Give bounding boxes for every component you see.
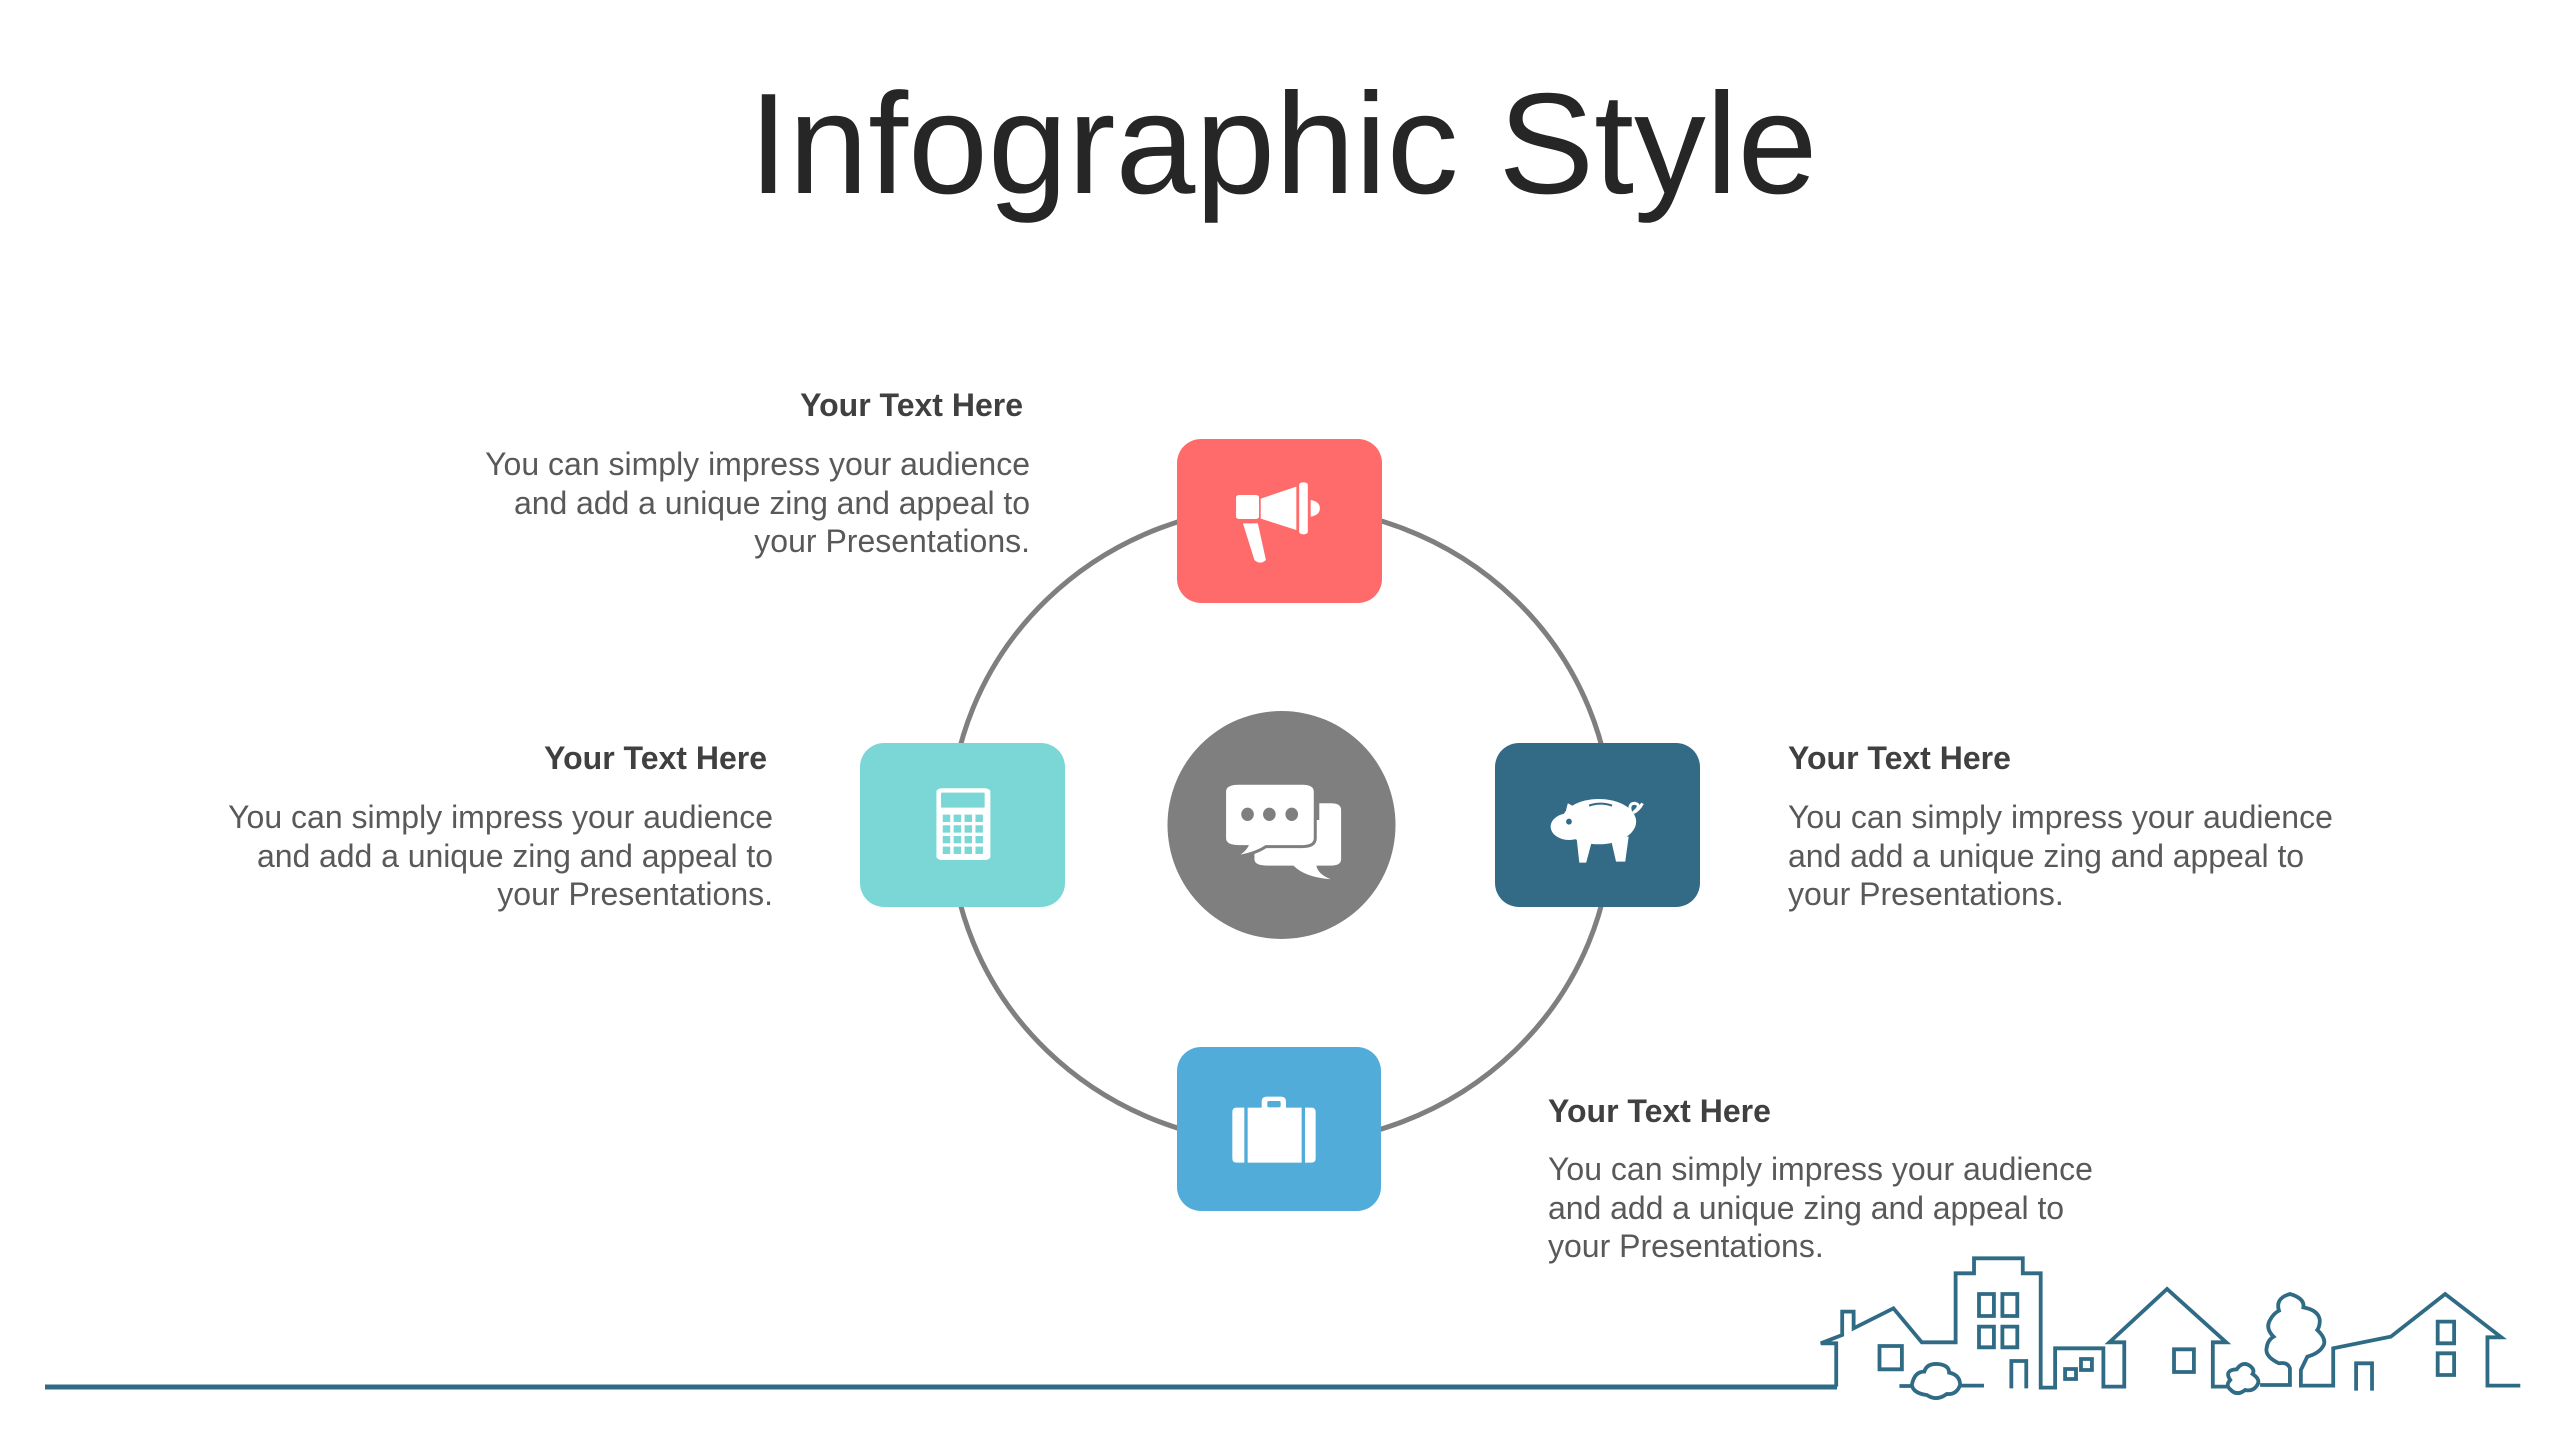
panel: left calculator box bbox=[860, 743, 1065, 907]
icon: suitcase bbox=[1232, 1097, 1316, 1163]
title: Infographic Style bbox=[749, 64, 1817, 224]
text block: bottom: and add a unique zing and appeal to bbox=[1548, 1190, 2064, 1226]
ring connecting the four boxes bbox=[950, 506, 1612, 1144]
ground line bbox=[45, 1384, 1837, 1390]
text block: top: and add a unique zing and appeal to bbox=[514, 485, 1030, 521]
text block: top bbox=[485, 387, 1030, 559]
panel: right piggy bank box bbox=[1495, 743, 1700, 907]
text block: bottom: You can simply impress your audience bbox=[1548, 1151, 2093, 1187]
text block: bottom: your Presentations. bbox=[1548, 1228, 1824, 1264]
panel: centre chat circle bbox=[1168, 711, 1396, 939]
icon: calculator bbox=[936, 788, 990, 860]
panel: bottom suitcase box bbox=[1177, 1047, 1381, 1211]
icon: speech bubbles bbox=[1225, 783, 1341, 879]
icon: megaphone bbox=[1236, 482, 1320, 563]
text block: right: Your Text Here bbox=[1788, 740, 2011, 776]
text block: right: your Presentations. bbox=[1788, 876, 2064, 912]
text block: top: your Presentations. bbox=[754, 523, 1030, 559]
panel: top megaphone box bbox=[1177, 439, 1382, 603]
icon: piggy bank bbox=[1551, 799, 1642, 863]
text block: bottom: Your Text Here bbox=[1548, 1093, 1771, 1129]
text block: top: You can simply impress your audience bbox=[485, 446, 1030, 482]
text block: left bbox=[228, 740, 773, 912]
text block: left: and add a unique zing and appeal to bbox=[257, 838, 773, 874]
text block: right bbox=[1788, 740, 2333, 912]
text block: bottom bbox=[1548, 1093, 2093, 1264]
text block: top: Your Text Here bbox=[800, 387, 1023, 423]
text block: right: You can simply impress your audience bbox=[1788, 799, 2333, 835]
text block: left: your Presentations. bbox=[497, 876, 773, 912]
text block: left: You can simply impress your audience bbox=[228, 799, 773, 835]
skyline illustration bbox=[1821, 1258, 2520, 1398]
text block: right: and add a unique zing and appeal to bbox=[1788, 838, 2304, 874]
text block: left: Your Text Here bbox=[544, 740, 767, 776]
